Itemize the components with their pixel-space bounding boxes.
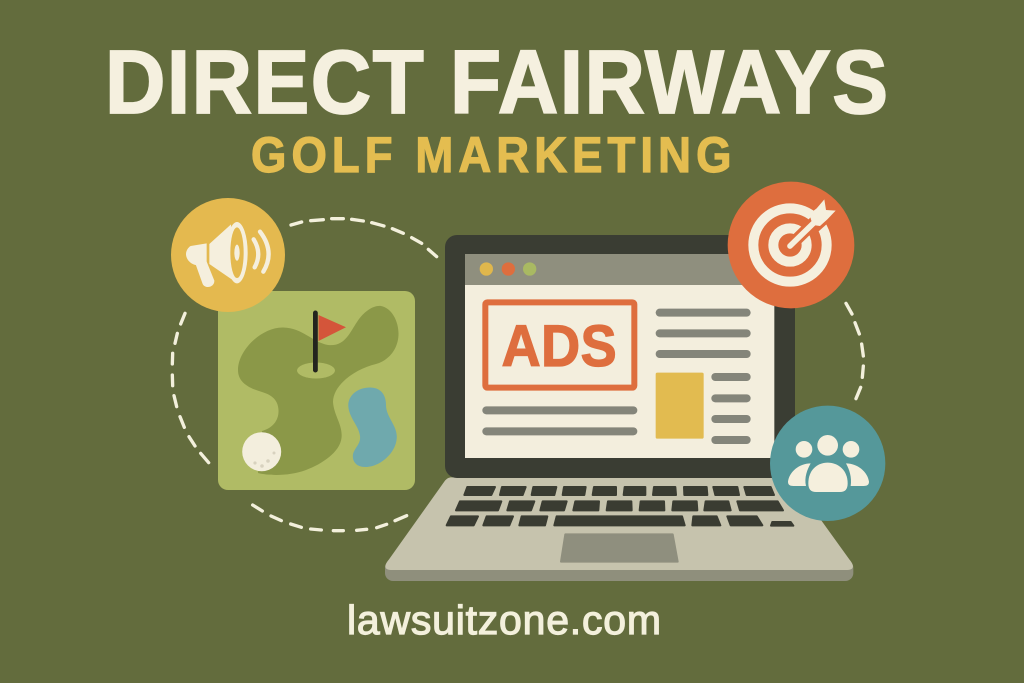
golf ball	[242, 432, 281, 471]
trackpad	[561, 534, 678, 562]
icon: audience badge	[770, 406, 885, 521]
laptop screen	[445, 235, 795, 478]
footer website: lawsuitzone.com	[347, 597, 661, 643]
ads banner	[485, 302, 634, 388]
dashed orbit: right arc	[846, 303, 863, 399]
text lines	[482, 309, 751, 444]
water hazard	[348, 388, 397, 467]
fairway	[238, 306, 399, 475]
title: DIRECT FAIRWAYS	[105, 32, 888, 133]
flag pole	[313, 310, 318, 372]
hole green	[297, 362, 335, 378]
subtitle: GOLF MARKETING	[251, 128, 731, 184]
laptop	[385, 235, 853, 581]
browser toolbar	[465, 254, 774, 285]
ads banner: ADS	[502, 313, 617, 378]
icon: megaphone badge	[171, 198, 285, 312]
yellow image block	[656, 373, 704, 439]
keyboard	[447, 487, 793, 526]
icon: target badge	[728, 182, 854, 308]
golf course map panel	[218, 291, 415, 490]
dashed orbit: left arc	[172, 219, 437, 531]
laptop base	[385, 477, 853, 581]
flag	[318, 315, 346, 341]
